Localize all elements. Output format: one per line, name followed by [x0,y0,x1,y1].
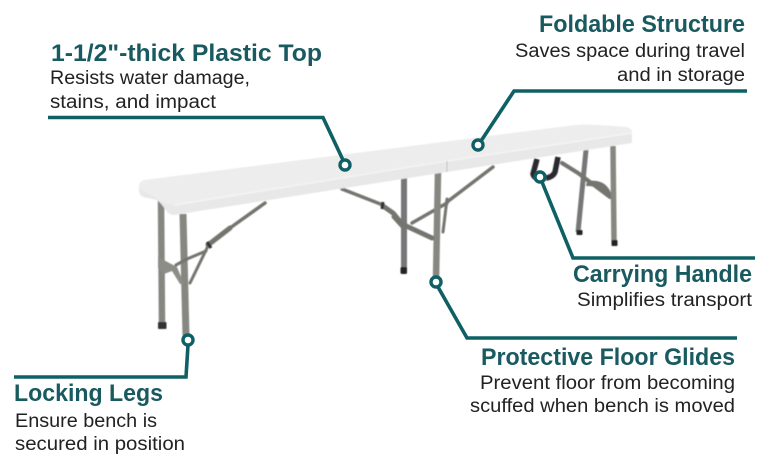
callout: foldable structure [473,11,747,150]
callout: protective floor glides: Prevent floor from becoming [480,373,735,394]
callout: locking legs: Ensure bench is [15,411,157,432]
callout: carrying handle: Carrying Handle [573,261,752,288]
left end [161,200,162,323]
callout: plastic top [48,40,350,170]
callout: plastic top: stains, and impact [50,92,217,113]
callout: foldable structure: and in storage [617,65,745,86]
illustration: folding bench [139,125,632,336]
bench legs and braces [158,146,618,336]
callout: locking legs: secured in position [15,434,185,455]
callout: protective floor glides: Protective Floor Glides [481,344,735,371]
carrying handle [533,157,558,178]
callout: protective floor glides [431,277,737,417]
callout: foldable structure: Foldable Structure [539,11,745,38]
callout: carrying handle: Simplifies transport [577,290,753,311]
callout: locking legs [14,335,193,455]
right end [578,150,586,232]
callout: plastic top: Resists water damage, [50,68,250,89]
callout: locking legs: Locking Legs [14,380,163,407]
callout: protective floor glides: scuffed when bench is moved [470,396,735,417]
callout: plastic top: 1-1/2"-thick Plastic Top [51,40,322,67]
middle [401,178,407,268]
callout: carrying handle [535,172,755,311]
bench top [139,125,632,215]
callout: foldable structure: Saves space during travel [515,41,745,62]
